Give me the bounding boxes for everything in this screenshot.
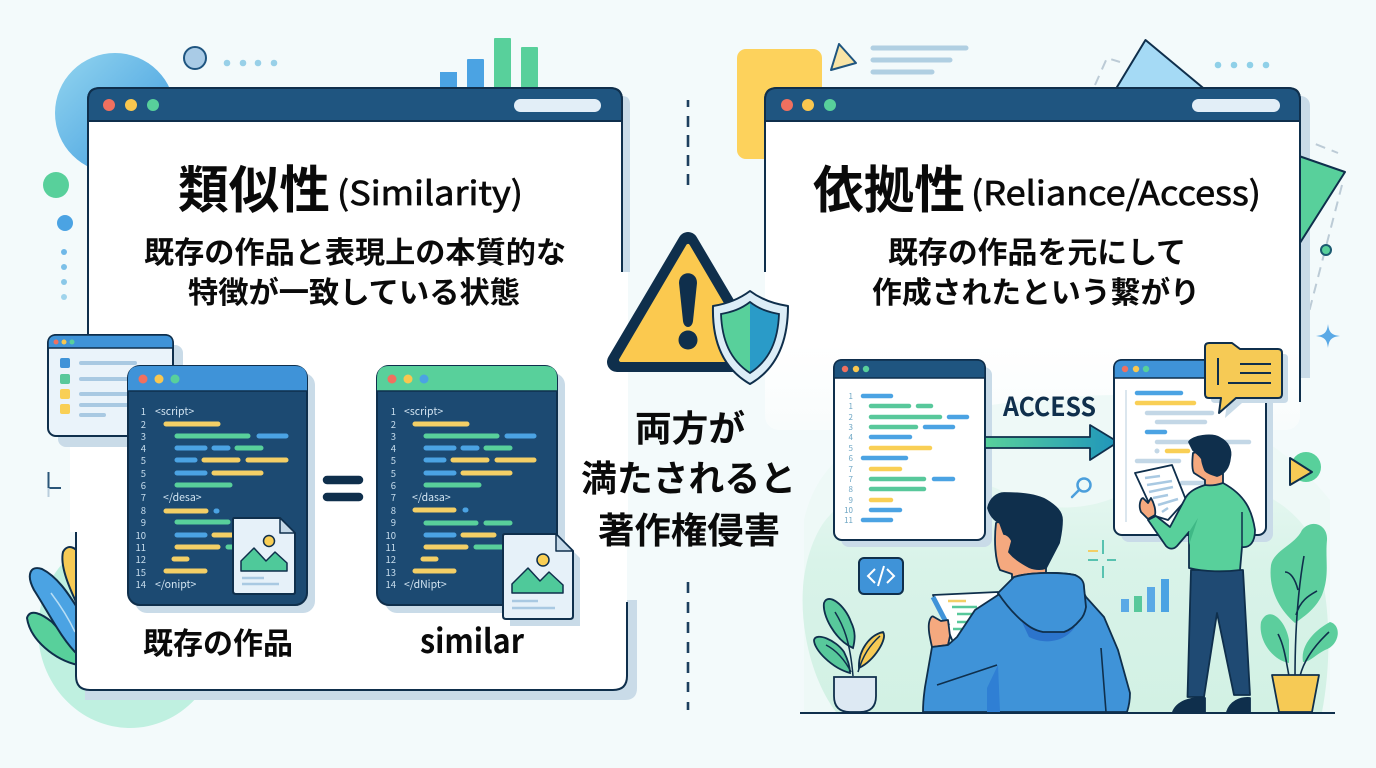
- code window: similar work: 1: [391, 404, 396, 418]
- code window: similar work: 7: [391, 490, 396, 504]
- code window: existing work: 5: [141, 453, 146, 467]
- heading: reliance: (Reliance/Access): [971, 167, 1261, 215]
- code window: source: 8: [849, 484, 854, 495]
- code window: similar work: 9: [391, 515, 396, 529]
- code window: similar work: 4: [391, 441, 396, 455]
- code window: similar work: 8: [391, 503, 396, 517]
- decoration: left leaves: [27, 547, 80, 665]
- code window: existing work: 8: [141, 503, 146, 517]
- code window: source: 7: [849, 464, 854, 475]
- code window: source: 5: [849, 443, 853, 454]
- panel: similarity: [70, 88, 637, 700]
- code window: existing work: </desa>: [163, 490, 202, 505]
- icon: shield: [713, 291, 788, 384]
- icon: image file, existing work: [233, 518, 295, 594]
- icon: sparkle: [1088, 550, 1098, 552]
- callout: speech bubble: [1205, 343, 1288, 418]
- code window: existing work: 14: [135, 577, 146, 591]
- code window: similar work: [377, 366, 565, 613]
- code window: existing work: 6: [141, 478, 146, 492]
- code window: existing work: 11: [135, 540, 146, 554]
- plant: left: [814, 599, 884, 712]
- code window: existing work: <script>: [155, 404, 194, 419]
- code window: similar work: 14: [385, 577, 396, 591]
- text: reliance description: 既存の作品を元にして: [888, 228, 1186, 272]
- code window: existing work: </onipt>: [155, 577, 197, 592]
- code window: existing work: 10: [135, 528, 146, 542]
- icon: code tag: [859, 558, 903, 594]
- code window: source: 3: [849, 422, 853, 433]
- label: existing work: 既存の作品: [143, 619, 293, 663]
- text: central conclusion: 著作権侵害: [598, 502, 780, 554]
- code window: similar work: 11: [385, 540, 396, 554]
- text: central conclusion: 両方が: [635, 400, 745, 452]
- code window: similar work: </dasa>: [412, 490, 451, 505]
- icon: sparkle strokes: [1088, 540, 1116, 578]
- label: access: ACCESS: [1002, 387, 1096, 424]
- icon: image file, similar work: [503, 534, 580, 626]
- code window: similar work: 12: [385, 552, 396, 566]
- label: similar: similar: [420, 615, 525, 663]
- background: pale haze behind windows: [804, 395, 1330, 712]
- code window: derived work: [1114, 360, 1273, 542]
- bar chart: top left decoration: [440, 38, 538, 92]
- code window: similar work: 13: [385, 565, 396, 579]
- code window: similar work: 2: [391, 417, 396, 431]
- heading: reliance: [813, 149, 1261, 223]
- arrow: access: [985, 425, 1118, 460]
- text: reliance description: [872, 228, 1200, 312]
- code window: existing work: 1: [141, 404, 146, 418]
- code window: source: 9: [849, 495, 853, 506]
- heading: similarity: [178, 149, 523, 223]
- code window: existing work: 5: [141, 466, 146, 480]
- text: central conclusion: [581, 400, 796, 554]
- code window: existing work: 15: [135, 565, 146, 579]
- heading: similarity: 類似性: [178, 149, 330, 223]
- background: green blob behind people: [803, 480, 1328, 712]
- code window: source: 6: [849, 453, 854, 464]
- divider: top dashed line: [687, 100, 689, 185]
- text: similarity description: 特徴が一致している状態: [188, 268, 520, 312]
- icon: magnifier: [1072, 478, 1090, 497]
- code window: similar work: 5: [391, 453, 396, 467]
- code window: existing work: 9: [141, 515, 146, 529]
- plant: right: [1261, 524, 1338, 712]
- code window: existing work: 3: [141, 429, 146, 443]
- ground line: [800, 712, 1335, 714]
- code window: source: 10: [844, 505, 854, 516]
- code window: source: 2: [849, 412, 854, 423]
- text: similarity description: [144, 228, 566, 312]
- code window: source: 11: [844, 515, 853, 526]
- decoration: left background shapes: [38, 47, 277, 728]
- icon: equals sign: [327, 480, 359, 497]
- code window: source: 1: [849, 401, 853, 412]
- panel: reliance: [765, 88, 1345, 430]
- icon: small window: [48, 335, 183, 447]
- person: seated with tablet: [923, 493, 1130, 712]
- icon: play button: [1290, 452, 1321, 485]
- code window: similar work: 6: [391, 478, 396, 492]
- text: central conclusion: 満たされると: [581, 450, 796, 502]
- code window: similar work: </dNipt>: [404, 577, 447, 592]
- code window: similar work: 3: [391, 429, 396, 443]
- code window: existing work: 4: [141, 441, 146, 455]
- icon: warning triangle: [617, 242, 759, 362]
- code window: existing work: 12: [135, 552, 146, 566]
- person: standing reader: [1135, 435, 1255, 712]
- code window: source: 7: [849, 474, 854, 485]
- code window: source: [834, 360, 992, 547]
- code window: existing work: 2: [141, 417, 146, 431]
- divider: bottom dashed line: [687, 582, 689, 710]
- bar chart: mini: [1121, 579, 1169, 612]
- text: similarity description: 既存の作品と表現上の本質的な: [144, 228, 566, 272]
- code window: source: 4: [849, 432, 854, 443]
- heading: similarity: (Similarity): [337, 167, 523, 215]
- code window: similar work: 5: [391, 466, 396, 480]
- code window: existing work: [128, 366, 315, 613]
- heading: reliance: 依拠性: [813, 149, 965, 223]
- decoration: right background shapes: [737, 40, 1342, 348]
- code window: source: 1: [849, 391, 853, 402]
- code window: existing work: 7: [141, 490, 146, 504]
- code window: similar work: <script>: [404, 404, 443, 419]
- code window: similar work: 10: [385, 528, 396, 542]
- text: reliance description: 作成されたという繋がり: [872, 268, 1200, 312]
